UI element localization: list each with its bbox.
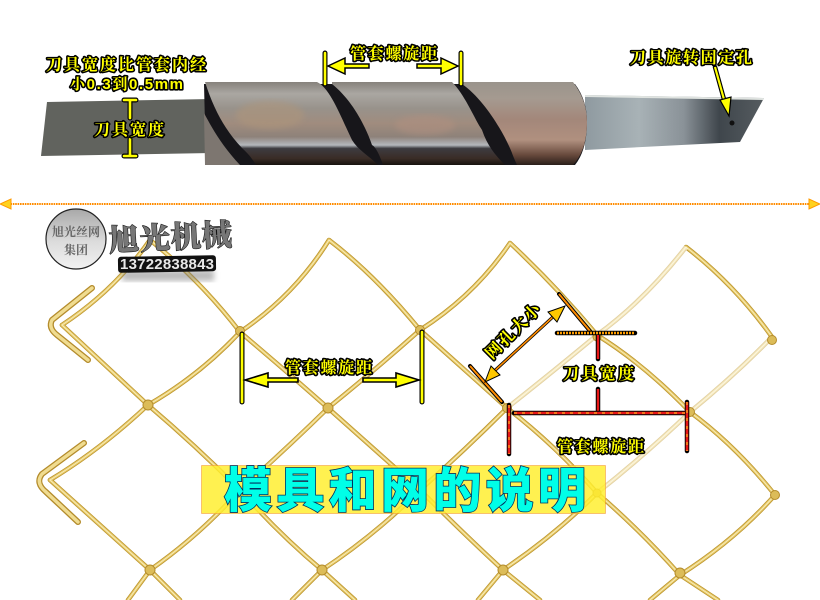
dimension: sleeve helical pitch (mesh) [242, 332, 422, 402]
wire mesh photo [39, 240, 780, 600]
label: blade rotation fixing hole: 刀具旋转固定孔 [630, 48, 752, 67]
sleeve segment 2 [332, 82, 505, 165]
dimension: mesh hole size: 网孔大小 [482, 299, 546, 363]
dimension: sleeve helical pitch (right) [509, 402, 687, 456]
label: blade rotation fixing hole [630, 48, 752, 116]
right blade [585, 95, 764, 150]
label: blade width vs sleeve diameter [46, 55, 207, 93]
dimension: sleeve helical pitch (pipe): 管套螺旋距 [350, 44, 437, 63]
wire knuckles [143, 326, 780, 578]
pipe sleeve dark inner [204, 84, 587, 165]
label: blade width vs sleeve diameter: 小0.3到0.5mm [70, 76, 183, 93]
logo circle: 集团 [64, 242, 88, 257]
pipe sleeve and blade photo [41, 82, 764, 165]
dimension: sleeve helical pitch (pipe) [325, 44, 461, 84]
dimension: mesh hole size [470, 294, 590, 402]
dimension: blade width [94, 100, 164, 156]
divider arrow [0, 199, 820, 209]
brand name: 旭光机械 [108, 219, 233, 258]
dimension: blade width (mesh) [557, 333, 635, 412]
small sleeve tail [204, 113, 240, 165]
dimension: sleeve helical pitch (right): 管套螺旋距 [557, 437, 644, 456]
phone number: 13722838843 [120, 256, 214, 273]
pale faded wires [507, 247, 772, 493]
logo circle [46, 209, 106, 269]
left blade [41, 99, 212, 156]
dimension: blade width: 刀具宽度 [94, 120, 164, 139]
dimension: blade width (mesh): 刀具宽度 [563, 364, 634, 383]
left selvage hooks [39, 288, 92, 522]
logo circle: 旭光丝网 [52, 224, 100, 239]
company logo [46, 209, 233, 281]
title banner: 模具和网的说明 [224, 465, 586, 518]
sleeve segment 1 [205, 82, 378, 165]
dimension: sleeve helical pitch (mesh): 管套螺旋距 [285, 358, 372, 377]
sleeve segment 3 [462, 82, 587, 165]
phone shadow [122, 270, 214, 281]
label: blade width vs sleeve diameter: 刀具宽度比管套内经 [46, 55, 207, 74]
